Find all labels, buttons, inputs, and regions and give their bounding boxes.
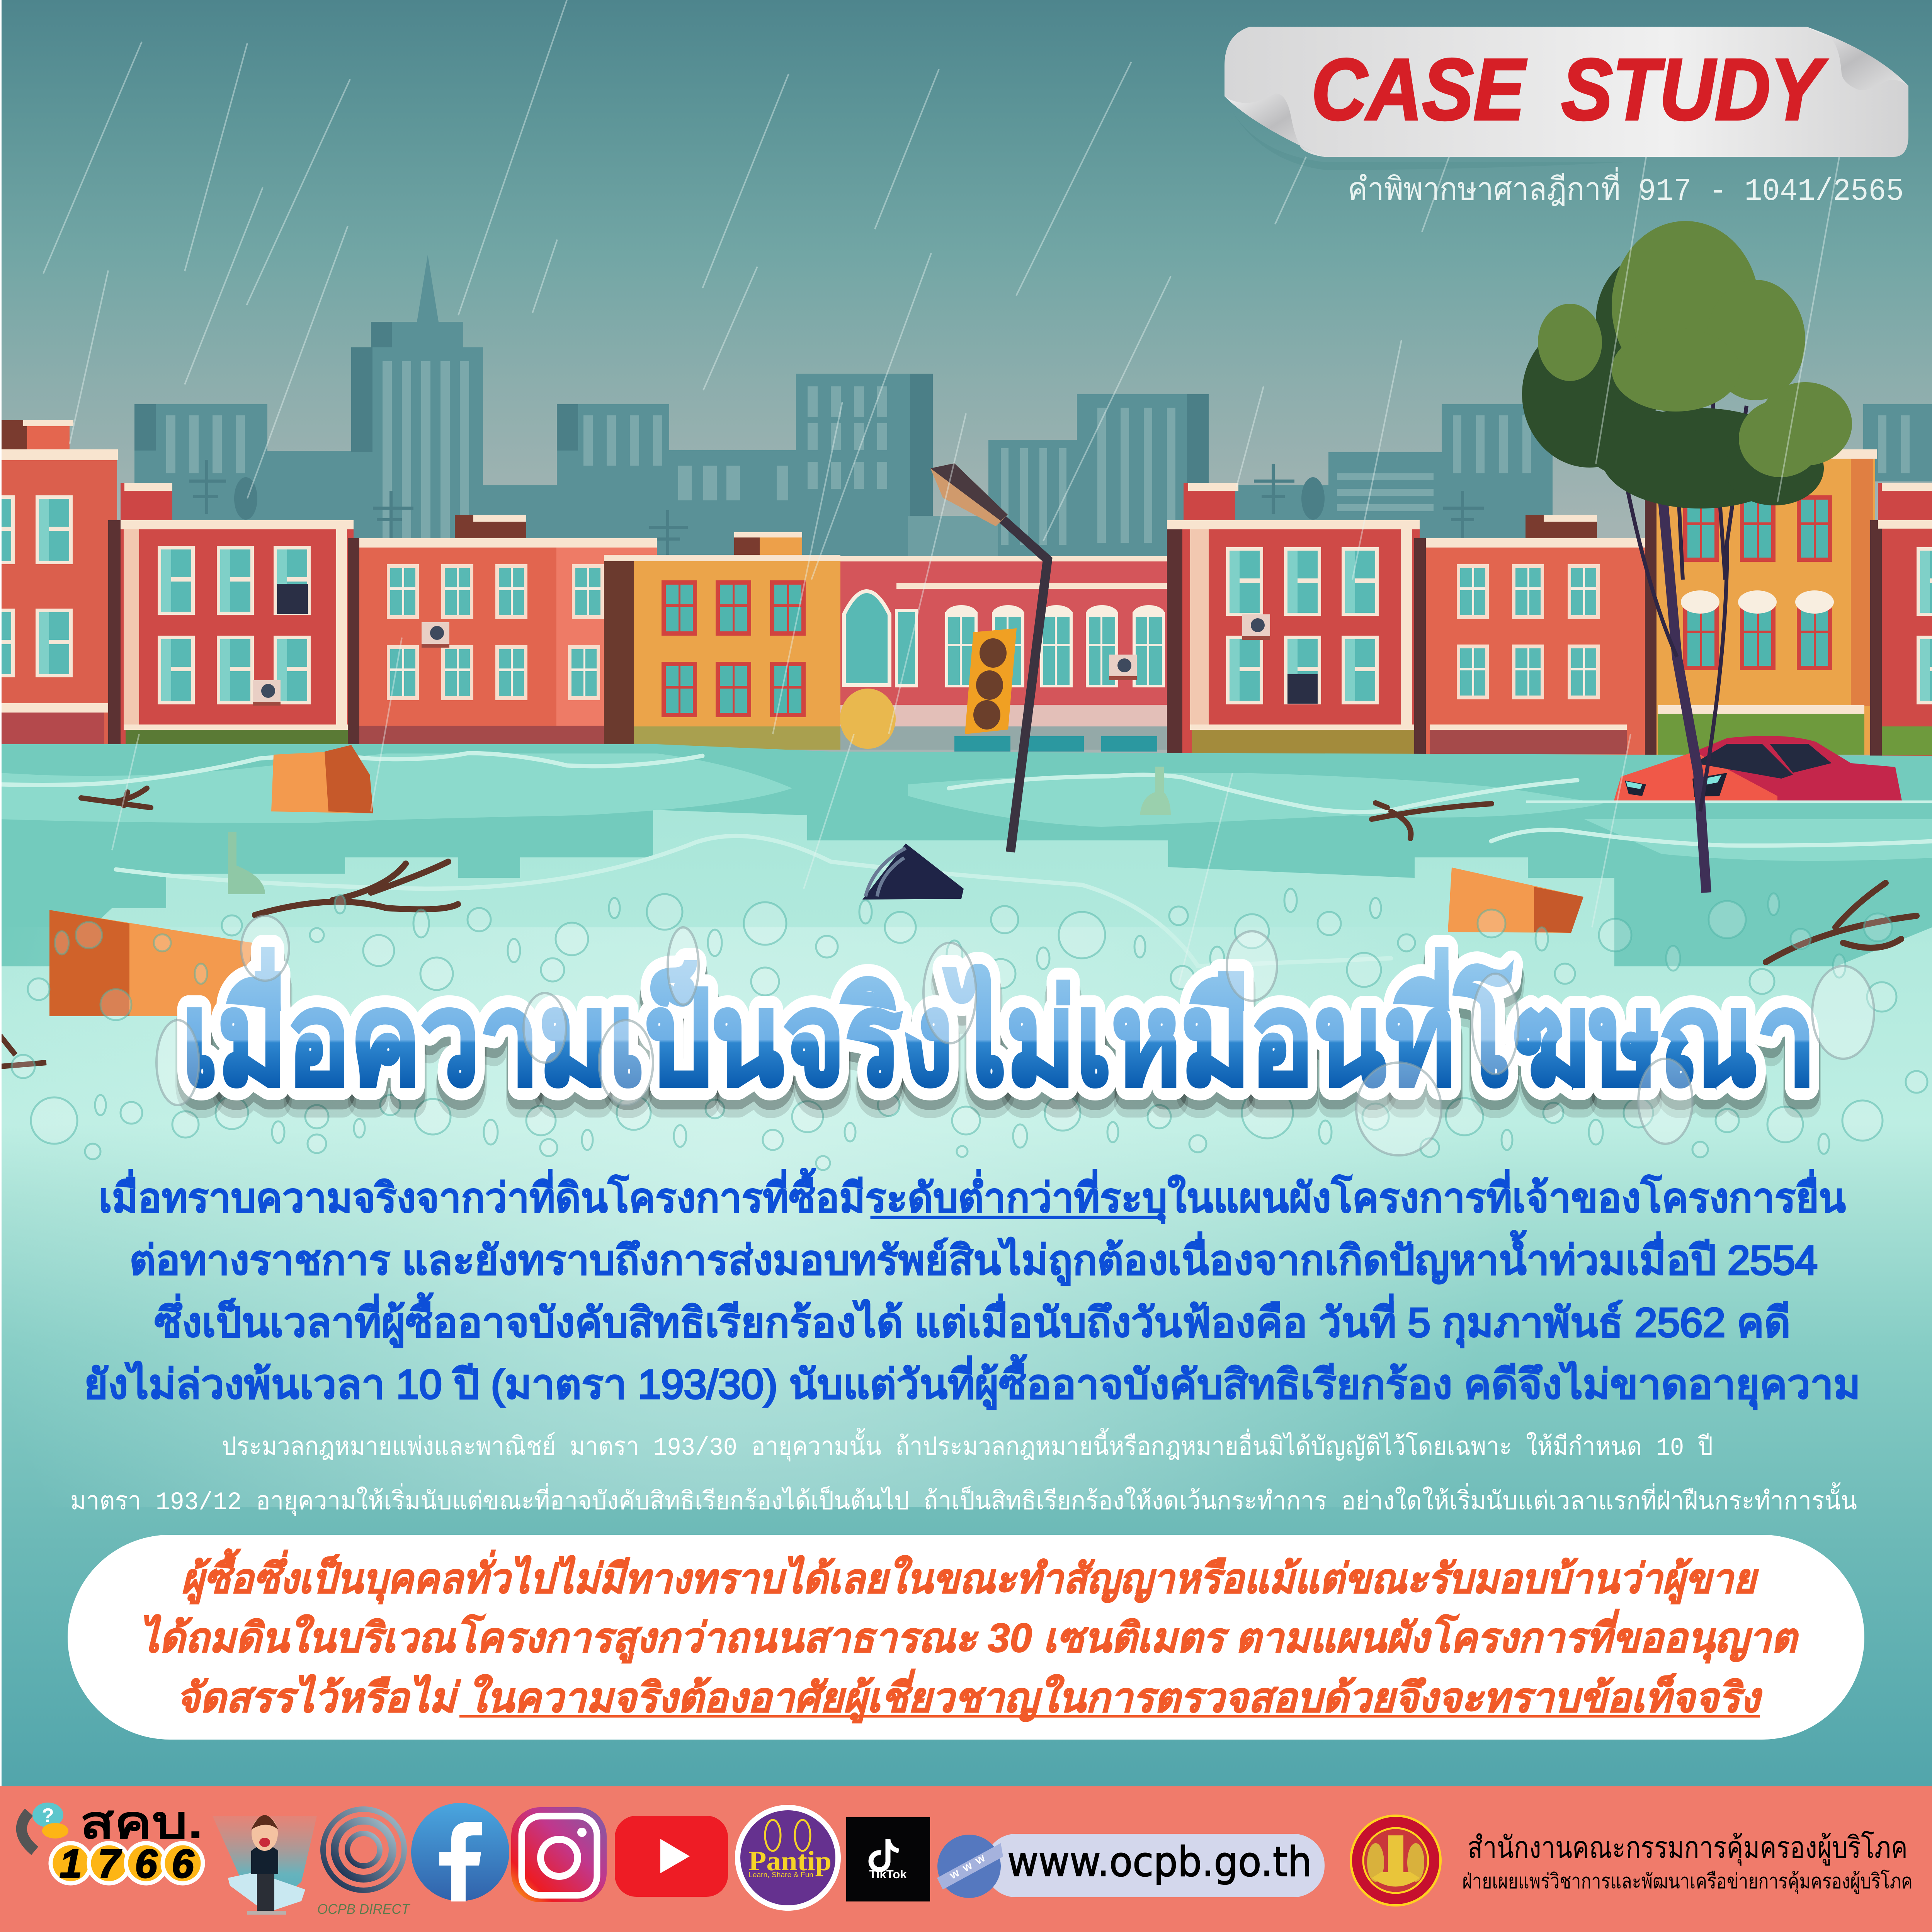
pantip icon: Pantip (748, 1845, 832, 1876)
youtube icon (615, 1816, 728, 1897)
lamp post and traffic light (840, 463, 1048, 852)
callout line 2: ได้ถมดินในบริเวณโครงการสูงกว่าถนนสาธารณะ 30 เซนติเมตร ตามแผนผังโครงการที่ขออนุญาต (139, 1609, 1799, 1663)
building 2 (108, 483, 354, 748)
paper shadow (1233, 112, 1623, 170)
section 193/30: ประมวลกฎหมายแพ่งและพาณิชย์ มาตรา 193/30 อายุความนั้น ถ้าประมวลกฎหมายนี้หรือกฎหมายอื่นมิได้บัญญัติไว้โดยเฉพาะ ให้มีกำหนด 10 ปี (222, 1428, 1713, 1463)
bottle left (228, 832, 265, 894)
building 1 (0, 420, 118, 747)
mascot with hologram (213, 1815, 317, 1915)
OCPB direct logo (317, 1809, 411, 1917)
tyre (862, 844, 964, 900)
tiktok icon (846, 1817, 930, 1901)
agency name (1462, 1830, 1913, 1894)
hotline number: 6 (172, 1842, 194, 1886)
hotline name: สคบ. (80, 1797, 203, 1848)
question bubble: ? (42, 1804, 54, 1827)
sky background (0, 0, 1932, 773)
case reference number: คำพิพากษาศาลฎีกาที่ 917 - 1041/2565 (1348, 167, 1904, 209)
orange box left (49, 910, 253, 1016)
footer bar (0, 1786, 1932, 1932)
website badge: www (947, 1851, 988, 1882)
buildings row (0, 420, 1932, 756)
hotline number (51, 1842, 203, 1886)
main title (182, 948, 1816, 1127)
flood water (0, 744, 1932, 1786)
legal reference lines (70, 1428, 1857, 1517)
line 4: ยังไม่ล่วงพ้นเวลา 10 ปี (มาตรา 193/30) นับแต่วันที่ผู้ซื้ออาจบังคับสิทธิเรียกร้อง คดีจึงไม่ขาดอายุความ (84, 1355, 1861, 1409)
left edge strip (0, 0, 2, 1786)
case study label (1225, 27, 1908, 170)
OCPB direct caption: OCPB DIRECT (317, 1901, 411, 1917)
curled paper banner (1225, 27, 1908, 157)
branch right (1372, 803, 1492, 838)
car (1526, 736, 1932, 802)
large droplets over title (156, 916, 1874, 1155)
branch center left (255, 862, 458, 915)
callout line 1: ผู้ซื้อซึ่งเป็นบุคคลทั่วไปไม่มีทางทราบได้เลยในขณะทำสัญญาหรือแม้แต่ขณะรับมอบบ้านว่าผู้ขาย (181, 1549, 1759, 1604)
building 6 (1167, 483, 1420, 754)
callout line 3: จัดสรรไว้หรือไม่ ในความจริงต้องอาศัยผู้เชี่ยวชาญในการตรวจสอบด้วยจึงจะทราบข้อเท็จจริง (176, 1669, 1763, 1723)
pantip icon (738, 1808, 838, 1908)
bottle mid (1140, 767, 1171, 815)
orange box far (271, 745, 373, 813)
underline (871, 1217, 1165, 1218)
branch right near (1766, 883, 1917, 962)
hotline number: 7 (98, 1842, 122, 1886)
facebook icon (411, 1803, 509, 1901)
building 9 (1870, 483, 1932, 756)
question bubble (32, 1803, 63, 1827)
label text: CASE STUDY (1311, 41, 1827, 138)
body paragraph (84, 1168, 1861, 1409)
bottom left fold (1225, 94, 1324, 157)
building 5 (840, 556, 1179, 752)
website badge: www.ocpb.go.th (1007, 1838, 1312, 1886)
top right fold (1806, 27, 1908, 90)
phone arrow (22, 1812, 35, 1851)
floating debris (0, 745, 1917, 1066)
line 1: เมื่อทราบความจริงจากว่าที่ดินโครงการที่ซื้อมีระดับต่ำกว่าที่ระบุในแผนผังโครงการที่เจ้าของโครงการยื่น (99, 1168, 1846, 1223)
pantip icon: Learn, Share & Fun (748, 1871, 813, 1879)
tree (1522, 221, 1852, 893)
government seal (1350, 1815, 1442, 1906)
section 193/12: มาตรา 193/12 อายุความให้เริ่มนับแต่ขณะที่อาจบังคับสิทธิเรียกร้องได้เป็นต้นไป ถ้าเป็นสิทธิเรียกร้องให้งดเว้นกระทำการ อย่างใดให้เริ่มนับแต่เวลาแรกที่ฝ่าฝืนกระทำการนั้น (70, 1482, 1857, 1517)
building 4 (604, 532, 840, 750)
water droplets (12, 889, 1927, 1170)
branch left edge (0, 1036, 46, 1066)
building 3 (348, 515, 657, 749)
skyline (134, 255, 1932, 567)
line 3: ซึ่งเป็นเวลาที่ผู้ซื้ออาจบังคับสิทธิเรียกร้องได้ แต่เมื่อนับถึงวันฟ้องคือ วันที่ 5 กุมภาพันธ์ 2562 คดี (154, 1293, 1791, 1347)
building 7 (1414, 515, 1645, 755)
tiktok icon: TikTok (869, 1867, 907, 1881)
orange box right (1448, 867, 1583, 933)
yellow bubble (42, 1823, 68, 1838)
callout pill (68, 1535, 1864, 1740)
callout underline (460, 1716, 1760, 1717)
hotline number: 6 (135, 1842, 158, 1886)
branch left far (81, 788, 151, 808)
building 8 (1645, 449, 1877, 755)
instagram icon (511, 1807, 607, 1902)
hotline logo (22, 1797, 203, 1886)
rain streaks (43, 0, 1839, 985)
website badge (937, 1834, 1325, 1898)
line 2: ต่อทางราชการ และยังทราบถึงการส่งมอบทรัพย์สินไม่ถูกต้องเนื่องจากเกิดปัญหาน้ำท่วมเมื่อปี 2554 (129, 1231, 1818, 1285)
hotline number: 1 (60, 1842, 82, 1886)
